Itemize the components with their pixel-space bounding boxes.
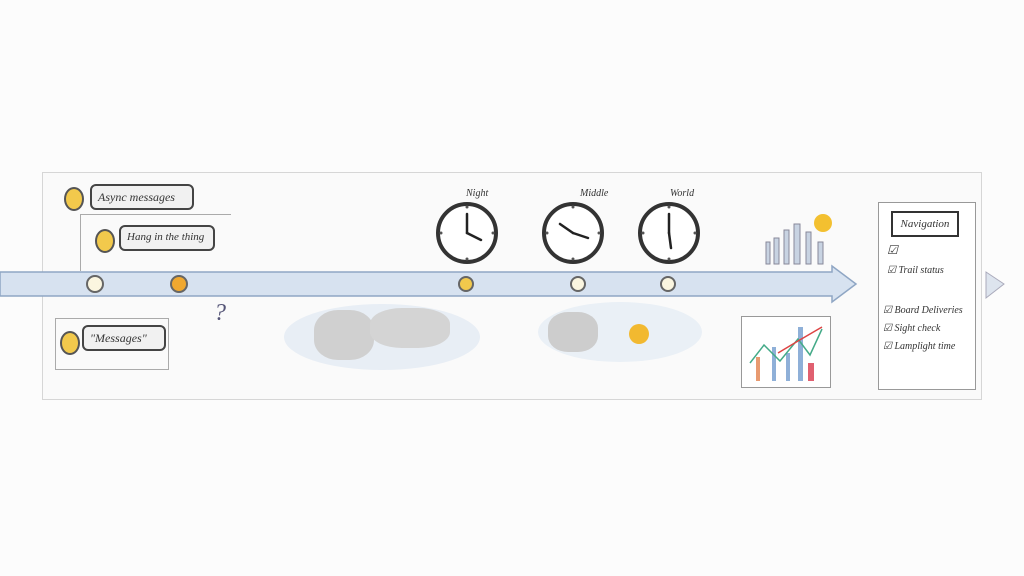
message 1 xyxy=(64,184,194,211)
clocks xyxy=(436,188,700,264)
timeline arrow xyxy=(0,264,1005,304)
message 2 xyxy=(80,214,231,271)
question mark: ? xyxy=(214,300,226,326)
clocks: Night xyxy=(466,188,488,199)
checklist title: Navigation xyxy=(901,218,949,230)
world maps xyxy=(284,302,702,370)
clocks: World xyxy=(670,188,694,199)
clocks: Middle xyxy=(580,188,608,199)
panel frame xyxy=(42,172,982,400)
message 3: "Messages" xyxy=(90,331,147,345)
checklist title xyxy=(891,211,959,237)
checklist panel: ☑ xyxy=(887,243,898,257)
checklist panel: ☑ Lamplight time xyxy=(883,341,955,352)
checklist panel: ☑ Trail status xyxy=(887,265,944,276)
checklist panel: ☑ Board Deliveries xyxy=(883,305,963,316)
message 2: Hang in the thing xyxy=(127,231,204,243)
line chart xyxy=(741,316,831,388)
message 1: Async messages xyxy=(98,190,175,204)
bar chart top xyxy=(766,214,832,264)
message 3 xyxy=(55,318,169,370)
checklist panel xyxy=(878,202,976,390)
timeline dots xyxy=(86,275,676,293)
checklist panel: ☑ Sight check xyxy=(883,323,940,334)
